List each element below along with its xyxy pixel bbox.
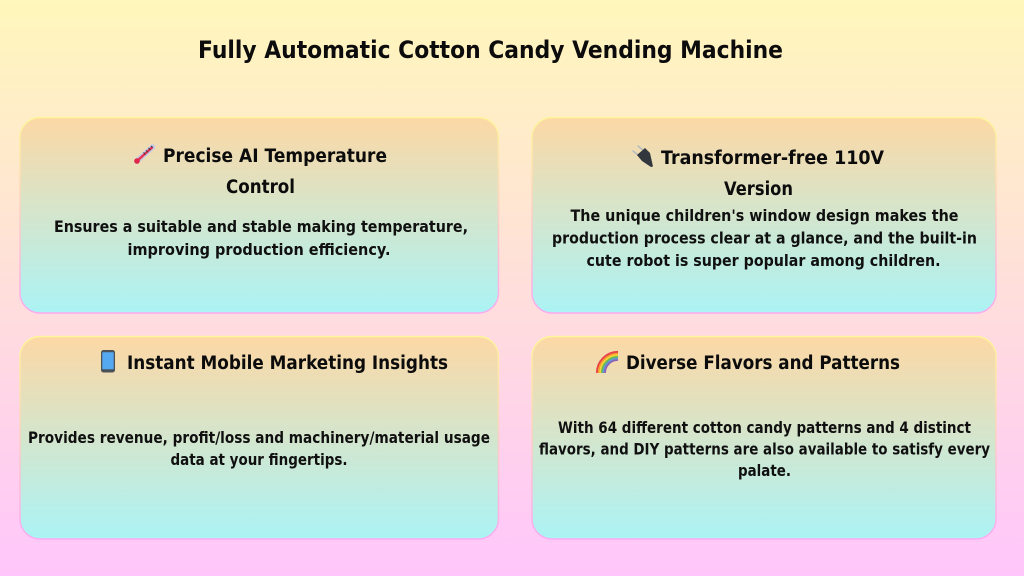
description: palate. [738, 461, 791, 480]
description [28, 428, 490, 469]
panel: diverse flavors and patterns [532, 336, 996, 539]
description: Ensures a suitable and stable making temperature, [54, 217, 468, 236]
panel: instant mobile marketing insights [20, 336, 498, 539]
panel: precise AI temperature control [20, 118, 498, 313]
icon: plug [633, 146, 653, 167]
description: data at your fingertips. [170, 450, 348, 469]
description [552, 206, 977, 270]
heading: Instant Mobile Marketing Insights [127, 353, 448, 374]
description: The unique children's window design makes the [570, 206, 958, 225]
heading: Diverse Flavors and Patterns [626, 353, 900, 374]
panel: transformer-free 110V version [532, 118, 996, 313]
description [54, 217, 468, 259]
description: improving production efficiency. [128, 240, 390, 259]
icon: rainbow [597, 352, 618, 373]
description: production process clear at a glance, and the built-in [552, 228, 977, 248]
description: Provides revenue, profit/loss and machinery/material usage [28, 428, 490, 447]
heading: Version [724, 179, 793, 200]
heading: Transformer-free 110V [661, 148, 885, 169]
heading [163, 146, 387, 198]
card background [532, 336, 996, 539]
icon: mobile phone [101, 350, 115, 372]
card background [20, 336, 498, 539]
card background [20, 118, 498, 313]
card background [532, 118, 996, 313]
heading: Precise AI Temperature [163, 146, 387, 167]
icon: thermometer [134, 146, 152, 164]
heading [661, 148, 885, 200]
description: cute robot is super popular among children. [586, 251, 940, 270]
description [539, 418, 991, 480]
title: Fully Automatic Cotton Candy Vending Machine [198, 36, 783, 64]
heading: Control [226, 177, 295, 198]
